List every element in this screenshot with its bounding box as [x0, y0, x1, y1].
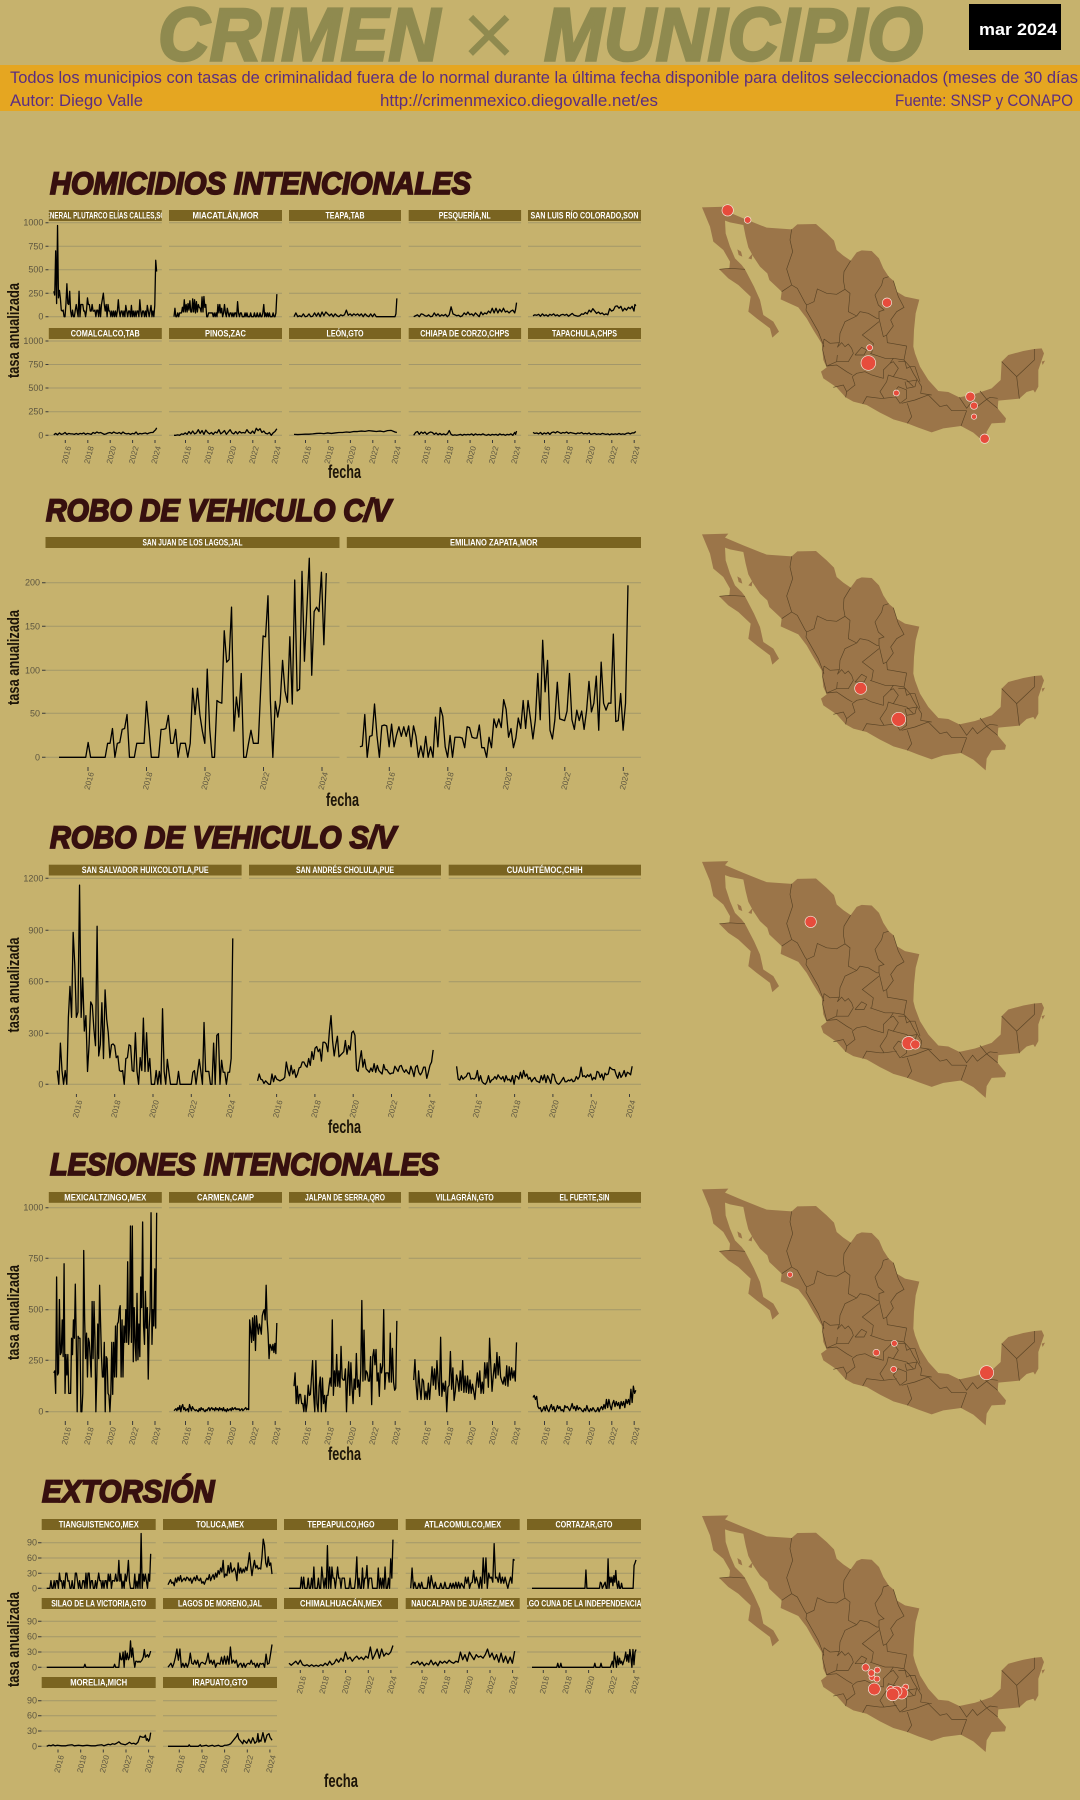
- facet: Carmen: 2016: [180, 1426, 194, 1446]
- facet: San Andrés Cholula: [249, 865, 441, 1119]
- y axis labels: [23, 1203, 48, 1417]
- facet: San Andrés Cholula: 2020: [348, 1099, 361, 1119]
- x axis title: fecha: [328, 1444, 362, 1464]
- y axis labels: 1000: [23, 336, 43, 346]
- facet: Dolores Hidalgo Cuna de la Independencia Nacional: [472, 1598, 696, 1695]
- facet: Emiliano Zapata: 2016: [384, 771, 397, 791]
- facet: Tepeapulco: TEPEAPULCO,HGO: [308, 1520, 374, 1530]
- y axis labels: 0: [38, 430, 43, 440]
- y axis labels: 50: [30, 708, 40, 718]
- x axis title: fecha: [326, 790, 360, 810]
- facet: Teapa: TEAPA,TAB: [326, 211, 365, 221]
- facet: San Juan de los Lagos: 2020: [200, 771, 213, 791]
- facet: San Juan de los Lagos: 2022: [258, 771, 272, 791]
- facet: El Fuerte: 2018: [562, 1426, 575, 1446]
- y axis labels: 0: [38, 1407, 43, 1417]
- facet: León: LEÓN,GTO: [326, 328, 364, 339]
- facet: León: [289, 328, 403, 465]
- facet: Comalcalco: 2016: [60, 445, 73, 465]
- facet: Chimalhuacán: 2022: [363, 1675, 376, 1695]
- heading: HOMICIDIOS INTENCIONALES: [50, 165, 471, 201]
- facet: Naucalpan de Juárez: 2022: [485, 1675, 498, 1695]
- facet: Emiliano Zapata: 2018: [442, 771, 456, 791]
- facet: Tapachula: 2024: [629, 445, 642, 465]
- y axis labels: 60: [27, 1711, 37, 1721]
- facet: Jalpan de Serra: 2020: [345, 1426, 358, 1446]
- facet: Naucalpan de Juárez: [406, 1598, 521, 1695]
- facet: Naucalpan de Juárez: NAUCALPAN DE JUÁREZ,MEX: [411, 1599, 514, 1609]
- y axis labels: 500: [28, 265, 43, 275]
- facet: Carmen: CARMEN,CAMP: [197, 1192, 254, 1202]
- facet: San Luis Río Colorado: [528, 210, 641, 317]
- facet: Naucalpan de Juárez: 2020: [462, 1675, 475, 1695]
- facet: Villagrán: 2020: [465, 1426, 478, 1446]
- facet: San Andrés Cholula: 2022: [386, 1099, 400, 1119]
- facet: Villagrán: [409, 1192, 523, 1446]
- facet: Tapachula: TAPACHULA,CHPS: [552, 329, 617, 339]
- facet: Tapachula: [528, 328, 642, 465]
- facet: San Salvador Huixcolotla: 2024: [224, 1099, 238, 1119]
- facet: San Andrés Cholula: SAN ANDRÉS CHOLULA,PUE: [296, 865, 394, 875]
- facet: Cuauhtémoc: CUAUHTÉMOC,CHIH: [507, 865, 583, 875]
- facet: Silao de la Victoria: SILAO DE LA VICTORIA,GTO: [51, 1599, 146, 1609]
- facet: Mexicaltzingo: 2024: [150, 1426, 163, 1446]
- facet: Dolores Hidalgo Cuna de la Independencia Nacional: 2022: [606, 1675, 619, 1695]
- y axis labels: 90: [27, 1696, 37, 1706]
- map: homicidios: [702, 205, 1045, 443]
- y axis labels: 100: [25, 665, 40, 675]
- facet: Tianguistenco: [42, 1519, 156, 1588]
- facet: El Fuerte: 2016: [539, 1426, 553, 1446]
- facet: San Juan de los Lagos: 2018: [141, 771, 155, 791]
- y axis labels: 250: [28, 288, 43, 298]
- y axis labels: 250: [28, 1355, 43, 1365]
- facet: San Juan de los Lagos: SAN JUAN DE LOS LAGOS,JAL: [142, 538, 243, 548]
- facet: San Juan de los Lagos: 2024: [317, 771, 330, 791]
- y axis labels: 60: [27, 1553, 37, 1563]
- facet: San Salvador Huixcolotla: 2022: [186, 1099, 199, 1119]
- facet: Irapuato: [163, 1677, 278, 1774]
- facet: Silao de la Victoria: [42, 1598, 156, 1667]
- facet: Irapuato: 2024: [265, 1754, 278, 1774]
- y axis labels: 30: [27, 1726, 37, 1736]
- map: robo de vehiculo s/v: [702, 861, 1045, 1098]
- facet: Emiliano Zapata: 2022: [559, 771, 573, 791]
- facet: El Fuerte: 2024: [629, 1426, 642, 1446]
- facet: San Andrés Cholula: 2016: [271, 1099, 285, 1119]
- facet: Chiapa de Corzo: 2024: [510, 445, 523, 465]
- y axis labels: 250: [28, 407, 43, 417]
- facet: Irapuato: 2016: [174, 1754, 187, 1774]
- y axis labels: 1000: [23, 1203, 43, 1213]
- y axis labels: 0: [35, 752, 40, 762]
- facet: Morelia: 2022: [121, 1754, 134, 1774]
- y axis labels: 60: [27, 1632, 37, 1642]
- facet: San Salvador Huixcolotla: [49, 865, 242, 1119]
- facet: Chiapa de Corzo: 2020: [465, 445, 478, 465]
- facet: Teapa: [289, 210, 401, 317]
- map: robo de vehiculo c/v: [702, 534, 1045, 770]
- x axis title: fecha: [324, 1771, 359, 1791]
- y axis labels: 150: [25, 621, 40, 631]
- facet: Pinos: 2024: [270, 445, 283, 465]
- facet: Jalpan de Serra: JALPAN DE SERRA,QRO: [305, 1192, 385, 1202]
- y axis labels: 30: [27, 1647, 37, 1657]
- y axis labels: 1000: [23, 218, 43, 228]
- y axis labels: 30: [27, 1568, 37, 1578]
- facet: San Salvador Huixcolotla: 2016: [71, 1099, 84, 1119]
- facet: Carmen: 2024: [270, 1426, 283, 1446]
- facet: Chimalhuacán: 2020: [340, 1675, 354, 1695]
- y axis labels: 750: [28, 360, 43, 370]
- panel: robo de vehiculo s/v: [4, 819, 641, 1137]
- y axis labels: 0: [32, 1583, 37, 1593]
- y axis title: tasa anualizada: [4, 1592, 23, 1687]
- facet: Cortazar: CORTAZAR,GTO: [556, 1520, 612, 1530]
- facet: Morelia: 2018: [75, 1754, 89, 1774]
- facet: Pinos: [169, 328, 283, 465]
- facet: Toluca: TOLUCA,MEX: [196, 1520, 244, 1530]
- facet: Comalcalco: 2022: [127, 445, 141, 465]
- y axis labels: [27, 1538, 42, 1751]
- panel: robo de vehiculo c/v: [4, 492, 641, 810]
- facet: Chimalhuacán: 2016: [295, 1675, 308, 1695]
- subtitle band: http://crimenmexico.diegovalle.net/es: [380, 91, 658, 110]
- facet: Chiapa de Corzo: CHIAPA DE CORZO,CHPS: [420, 329, 509, 339]
- facet: Mexicaltzingo: 2020: [105, 1426, 118, 1446]
- facet: Dolores Hidalgo Cuna de la Independencia Nacional: 2018: [561, 1675, 574, 1695]
- facet: Miacatlán: MIACATLÁN,MOR: [192, 211, 259, 221]
- y axis title: tasa anualizada: [4, 1265, 23, 1360]
- title: [158, 0, 923, 86]
- facet: Comalcalco: 2018: [82, 445, 96, 465]
- facet: Cuauhtémoc: 2024: [624, 1099, 638, 1119]
- y axis labels: 1200: [23, 873, 43, 883]
- facet: Irapuato: 2020: [219, 1754, 233, 1774]
- panel: extorsión: [4, 1473, 696, 1791]
- facet: Pesquería: PESQUERÍA,NL: [439, 211, 491, 221]
- facet: Jalpan de Serra: 2016: [300, 1426, 314, 1446]
- y axis labels: [23, 873, 48, 1089]
- facet: Chiapa de Corzo: 2016: [420, 445, 433, 465]
- facet: Chimalhuacán: CHIMALHUACÁN,MEX: [300, 1599, 382, 1609]
- facet: Pinos: 2018: [203, 445, 216, 465]
- facet: Emiliano Zapata: [347, 537, 641, 791]
- facet: Pesquería: [409, 210, 521, 317]
- facet: Villagrán: 2018: [442, 1426, 456, 1446]
- facet: Cuauhtémoc: [449, 865, 641, 1119]
- facet: Miacatlán: [169, 210, 282, 317]
- facet: Cuauhtémoc: 2022: [586, 1099, 599, 1119]
- facet: Emiliano Zapata: EMILIANO ZAPATA,MOR: [450, 538, 538, 548]
- y axis labels: 750: [28, 241, 43, 251]
- facet: Chimalhuacán: 2024: [386, 1675, 399, 1695]
- facet: Carmen: 2020: [225, 1426, 238, 1446]
- facet: Jalpan de Serra: 2024: [390, 1426, 403, 1446]
- y axis title: tasa anualizada: [4, 283, 23, 378]
- facet: Tapachula: 2022: [606, 445, 620, 465]
- facet: Morelia: [42, 1677, 157, 1774]
- panel: lesiones intencionales: [4, 1146, 642, 1464]
- date badge: [969, 4, 1061, 50]
- facet: San Salvador Huixcolotla: SAN SALVADOR HUIXCOLOTLA,PUE: [82, 865, 209, 875]
- facet: Emiliano Zapata: 2020: [501, 771, 514, 791]
- y axis labels: 0: [38, 1079, 43, 1089]
- facet: Toluca: [163, 1519, 277, 1588]
- y axis labels: 600: [28, 977, 43, 987]
- y axis labels: 200: [25, 578, 40, 588]
- facet: Mexicaltzingo: MEXICALTZINGO,MEX: [64, 1192, 146, 1202]
- facet: El Fuerte: 2020: [584, 1426, 597, 1446]
- y axis labels: 500: [28, 1305, 43, 1315]
- facet: Mexicaltzingo: 2018: [82, 1426, 96, 1446]
- y axis labels: 300: [28, 1028, 43, 1038]
- facet: Jalpan de Serra: 2018: [323, 1426, 336, 1446]
- facet: Dolores Hidalgo Cuna de la Independencia Nacional: 2016: [538, 1675, 551, 1695]
- facet: Pinos: 2020: [225, 445, 238, 465]
- y axis labels: 0: [32, 1741, 37, 1751]
- facet: San Salvador Huixcolotla: 2018: [109, 1099, 123, 1119]
- facet: San Andrés Cholula: 2024: [424, 1099, 438, 1119]
- facet: Morelia: 2024: [143, 1754, 157, 1774]
- facet: Villagrán: 2022: [487, 1426, 501, 1446]
- y axis title: tasa anualizada: [4, 937, 23, 1032]
- facet: Morelia: 2016: [53, 1754, 66, 1774]
- heading: LESIONES INTENCIONALES: [50, 1146, 439, 1182]
- facet: Atlacomulco: ATLACOMULCO,MEX: [424, 1520, 501, 1530]
- facet: Comalcalco: 2020: [105, 445, 118, 465]
- facet: Cuauhtémoc: 2018: [509, 1099, 523, 1119]
- y axis labels: 500: [28, 383, 43, 393]
- facet: Comalcalco: 2024: [150, 445, 163, 465]
- y axis labels: 90: [27, 1538, 37, 1548]
- heading: ROBO DE VEHICULO C/V: [46, 492, 394, 528]
- facet: Tianguistenco: TIANGUISTENCO,MEX: [59, 1520, 139, 1530]
- facet: Comalcalco: [49, 328, 163, 465]
- y axis labels: [25, 578, 46, 762]
- facet: Chiapa de Corzo: [409, 328, 523, 465]
- facet: Dolores Hidalgo Cuna de la Independencia Nacional: 2024: [629, 1675, 642, 1695]
- facet: Lagos de Moreno: [163, 1598, 277, 1667]
- facet: Chiapa de Corzo: 2022: [487, 445, 501, 465]
- facet: Naucalpan de Juárez: 2018: [439, 1675, 453, 1695]
- date badge: mar 2024: [979, 20, 1058, 39]
- facet: El Fuerte: 2022: [606, 1426, 620, 1446]
- facet: San Andrés Cholula: 2018: [310, 1099, 323, 1119]
- facet: León: 2018: [323, 445, 336, 465]
- facet: León: 2022: [367, 445, 381, 465]
- facet: Carmen: [169, 1192, 283, 1446]
- facet: Cuauhtémoc: 2020: [548, 1099, 561, 1119]
- facet: Emiliano Zapata: 2024: [618, 771, 631, 791]
- facet: León: 2024: [390, 445, 403, 465]
- map: lesiones intencionales: [702, 1189, 1045, 1425]
- y axis labels: 0: [38, 312, 43, 322]
- facet: Carmen: 2022: [247, 1426, 261, 1446]
- facet: Villagrán: VILLAGRÁN,GTO: [436, 1192, 494, 1202]
- facet: San Salvador Huixcolotla: 2020: [148, 1099, 161, 1119]
- facet: San Juan de los Lagos: [46, 537, 340, 791]
- heading: ROBO DE VEHICULO S/V: [50, 819, 399, 855]
- subtitle band: [0, 65, 1080, 111]
- facet: General Plutarco Elías Calles: [41, 210, 170, 317]
- facet: Naucalpan de Juárez: 2024: [507, 1675, 521, 1695]
- y axis labels: 900: [28, 925, 43, 935]
- facet: Lagos de Moreno: LAGOS DE MORENO,JAL: [178, 1599, 262, 1609]
- facet: Jalpan de Serra: [289, 1192, 403, 1446]
- facet: San Luis Río Colorado: SAN LUIS RÍO COLORADO,SON: [530, 211, 638, 221]
- facet: León: 2016: [300, 445, 314, 465]
- y axis title: tasa anualizada: [4, 610, 23, 705]
- facet: El Fuerte: [528, 1192, 642, 1446]
- facet: Jalpan de Serra: 2022: [367, 1426, 381, 1446]
- facet: Dolores Hidalgo Cuna de la Independencia Nacional: 2020: [583, 1675, 597, 1695]
- facet: Mexicaltzingo: 2016: [60, 1426, 73, 1446]
- map: extorsión: [702, 1515, 1045, 1752]
- facet: León: 2020: [345, 445, 358, 465]
- facet: Chiapa de Corzo: 2018: [442, 445, 456, 465]
- facet: Tapachula: 2018: [562, 445, 575, 465]
- subtitle band: Todos los municipios con tasas de criminalidad fuera de lo normal durante la última fecha disponible para delitos seleccionados (meses de 30 días: [10, 68, 1078, 87]
- facet: Tapachula: 2020: [584, 445, 597, 465]
- facet: San Juan de los Lagos: 2016: [83, 771, 96, 791]
- facet: Pinos: 2022: [247, 445, 261, 465]
- facet: Pinos: PINOS,ZAC: [205, 329, 246, 339]
- facet: Atlacomulco: [406, 1519, 520, 1588]
- facet: Carmen: 2018: [203, 1426, 216, 1446]
- facet: Tepeapulco: [284, 1519, 398, 1588]
- facet: Chimalhuacán: 2018: [318, 1675, 331, 1695]
- facet: Irapuato: 2018: [197, 1754, 210, 1774]
- y axis labels: [23, 218, 48, 440]
- facet: Cuauhtémoc: 2016: [471, 1099, 484, 1119]
- facet: Villagrán: 2016: [420, 1426, 433, 1446]
- facet: Villagrán: 2024: [510, 1426, 523, 1446]
- heading: EXTORSIÓN: [42, 1473, 216, 1509]
- facet: Irapuato: IRAPUATO,GTO: [192, 1678, 248, 1688]
- facet: El Fuerte: EL FUERTE,SIN: [560, 1192, 610, 1202]
- facet: Pinos: 2016: [180, 445, 194, 465]
- y axis labels: 750: [28, 1253, 43, 1263]
- facet: Mexicaltzingo: [49, 1192, 163, 1446]
- facet: Cortazar: [527, 1519, 641, 1588]
- subtitle band: Autor: Diego Valle: [10, 91, 143, 110]
- panel: homicidios intencionales: [4, 165, 642, 482]
- facet: Morelia: MORELIA,MICH: [70, 1678, 127, 1688]
- facet: Naucalpan de Juárez: 2016: [417, 1675, 430, 1695]
- x axis title: fecha: [328, 1117, 362, 1137]
- facet: Mexicaltzingo: 2022: [127, 1426, 141, 1446]
- facet: Tapachula: 2016: [539, 445, 553, 465]
- y axis labels: 0: [32, 1662, 37, 1672]
- y axis labels: 90: [27, 1616, 37, 1626]
- x axis title: fecha: [328, 462, 362, 482]
- facet: Chimalhuacán: [284, 1598, 399, 1695]
- facet: Irapuato: 2022: [242, 1754, 255, 1774]
- facet: Morelia: 2020: [98, 1754, 111, 1774]
- facet: Comalcalco: COMALCALCO,TAB: [71, 329, 140, 339]
